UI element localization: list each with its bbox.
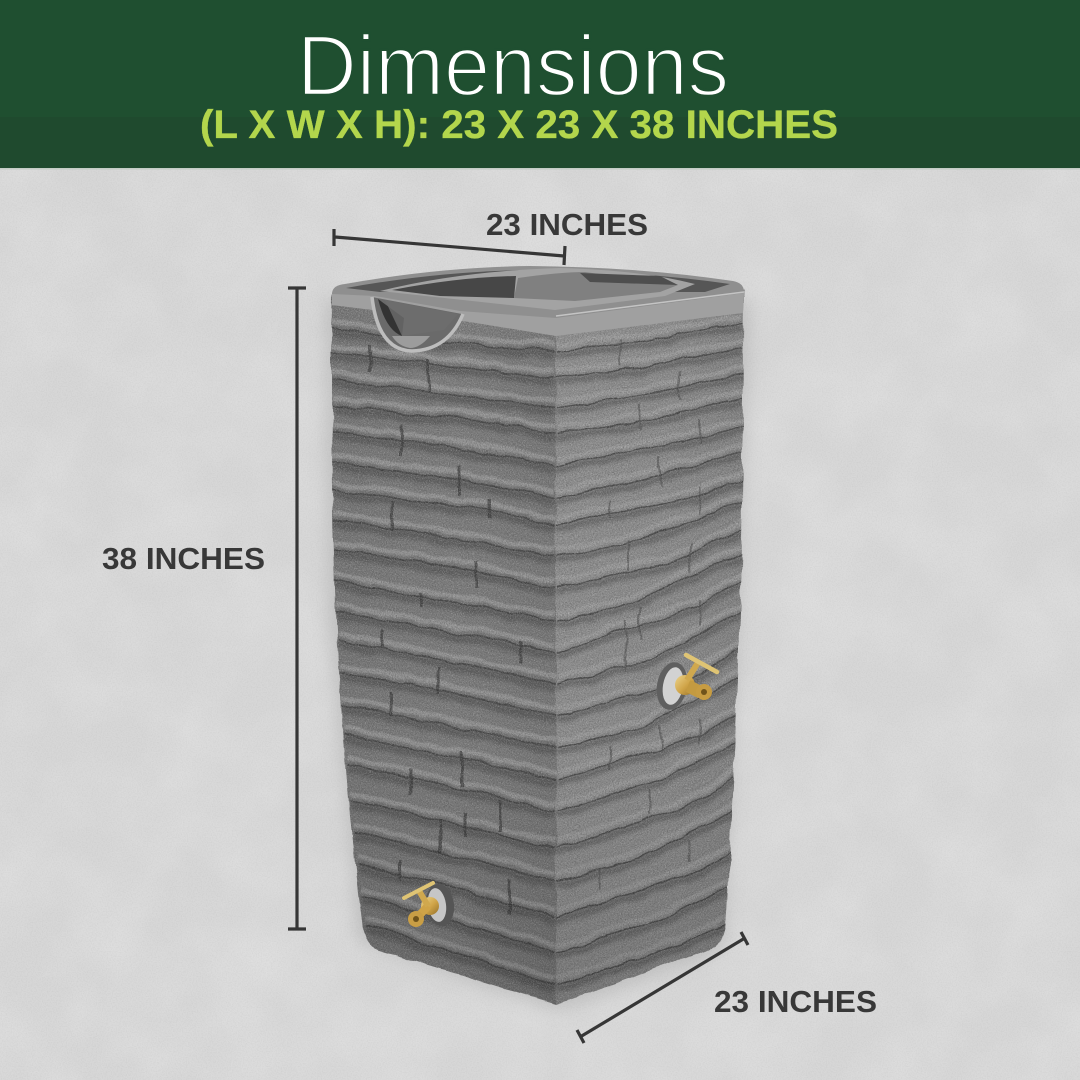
barrel rim	[332, 266, 744, 351]
stone courses	[320, 285, 750, 1010]
barrel right face	[556, 290, 744, 1004]
crisp course shadow lines	[331, 322, 744, 986]
dimension line: height	[288, 288, 306, 929]
subtitle: (L X W X H): 23 X 23 X 38 INCHES	[200, 103, 838, 147]
light barrel grain	[320, 285, 750, 1010]
right face joints	[600, 340, 700, 890]
dimension line: top width	[334, 229, 565, 265]
recessed shadow bands	[331, 326, 744, 990]
label: bottom 23 inches: 23 INCHES	[714, 984, 877, 1019]
stone top highlights	[331, 315, 744, 979]
barrel soft shadow	[326, 300, 750, 1010]
header banner	[0, 0, 1080, 170]
spigot: left face	[404, 882, 457, 928]
dimension line: bottom depth	[577, 932, 748, 1043]
overflow spout	[372, 297, 462, 350]
spigot: right face	[653, 655, 717, 712]
barrel body	[320, 285, 750, 1010]
label: 38 inches: 38 INCHES	[102, 541, 265, 576]
label: top 23 inches: 23 INCHES	[486, 207, 648, 242]
dark barrel grain	[320, 285, 750, 1010]
barrel left face	[332, 294, 556, 1004]
left face joints	[370, 346, 520, 914]
lower darkening	[352, 809, 732, 1005]
title: Dimensions	[297, 19, 729, 114]
barrel: stacked-stone rain barrel	[320, 266, 750, 1010]
corner highlight	[555, 330, 557, 1004]
